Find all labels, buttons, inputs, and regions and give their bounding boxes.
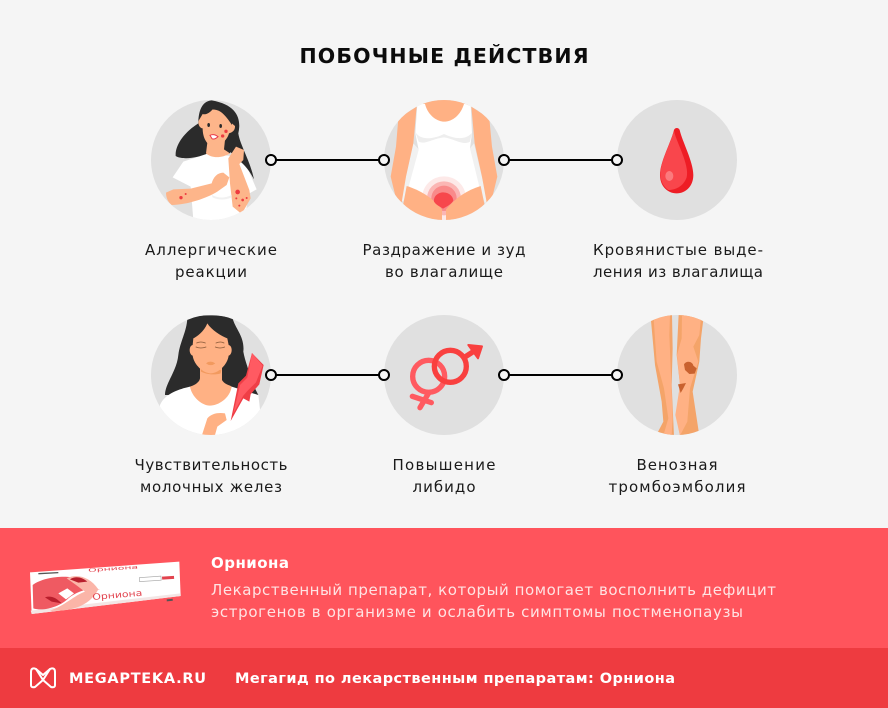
title: ПОБОЧНЫЕ ДЕЙСТВИЯ: [300, 43, 588, 68]
label: increased libido: Повышение: [392, 456, 496, 474]
drug package: Орниона: [92, 589, 143, 603]
label: breast tenderness: молочных желез: [140, 478, 282, 496]
drug package: [30, 562, 181, 614]
icon: legs with thromboembolism: [617, 314, 737, 436]
label: irritation and itching: Раздражение и зуд: [362, 241, 526, 259]
drug description: Лекарственный препарат, который помогает восполнить дефицит: [211, 581, 776, 599]
icon: logo: [31, 668, 55, 687]
label: irritation and itching: во влагалище: [385, 263, 503, 281]
label: increased libido: либидо: [412, 478, 476, 496]
panel: footer: [0, 648, 888, 708]
drug package: Орниона: [88, 565, 138, 574]
drug name: Орниона: [211, 554, 289, 572]
icon: torso with irritation: [384, 97, 504, 222]
label: bloody discharge: Кровянистые выде-: [593, 241, 763, 259]
brand name: MEGAPTEKA.RU: [69, 671, 206, 687]
label: allergic reactions: Аллергические: [145, 241, 277, 259]
connector: top left: [266, 155, 389, 165]
icon: gender symbols: [384, 315, 504, 435]
footer guide title: Мегагид по лекарственным препаратам: Орниона: [235, 671, 675, 687]
label: venous thromboembolism: тромбоэмболия: [608, 478, 746, 496]
connector: bottom right: [499, 370, 622, 380]
icon: woman with breast pain: [151, 315, 271, 438]
label: breast tenderness: Чувствительность: [134, 456, 288, 474]
icon: blood drop: [617, 100, 737, 220]
drug description: эстрогенов в организме и ослабить симптомы постменопаузы: [211, 603, 743, 621]
label: bloody discharge: ления из влагалища: [593, 263, 763, 281]
connector: top right: [499, 155, 622, 165]
connector: bottom left: [266, 370, 389, 380]
label: allergic reactions: реакции: [175, 263, 247, 281]
icon: woman with allergic rash: [151, 100, 271, 220]
label: venous thromboembolism: Венозная: [636, 456, 718, 474]
panel: drug info: [0, 528, 888, 648]
